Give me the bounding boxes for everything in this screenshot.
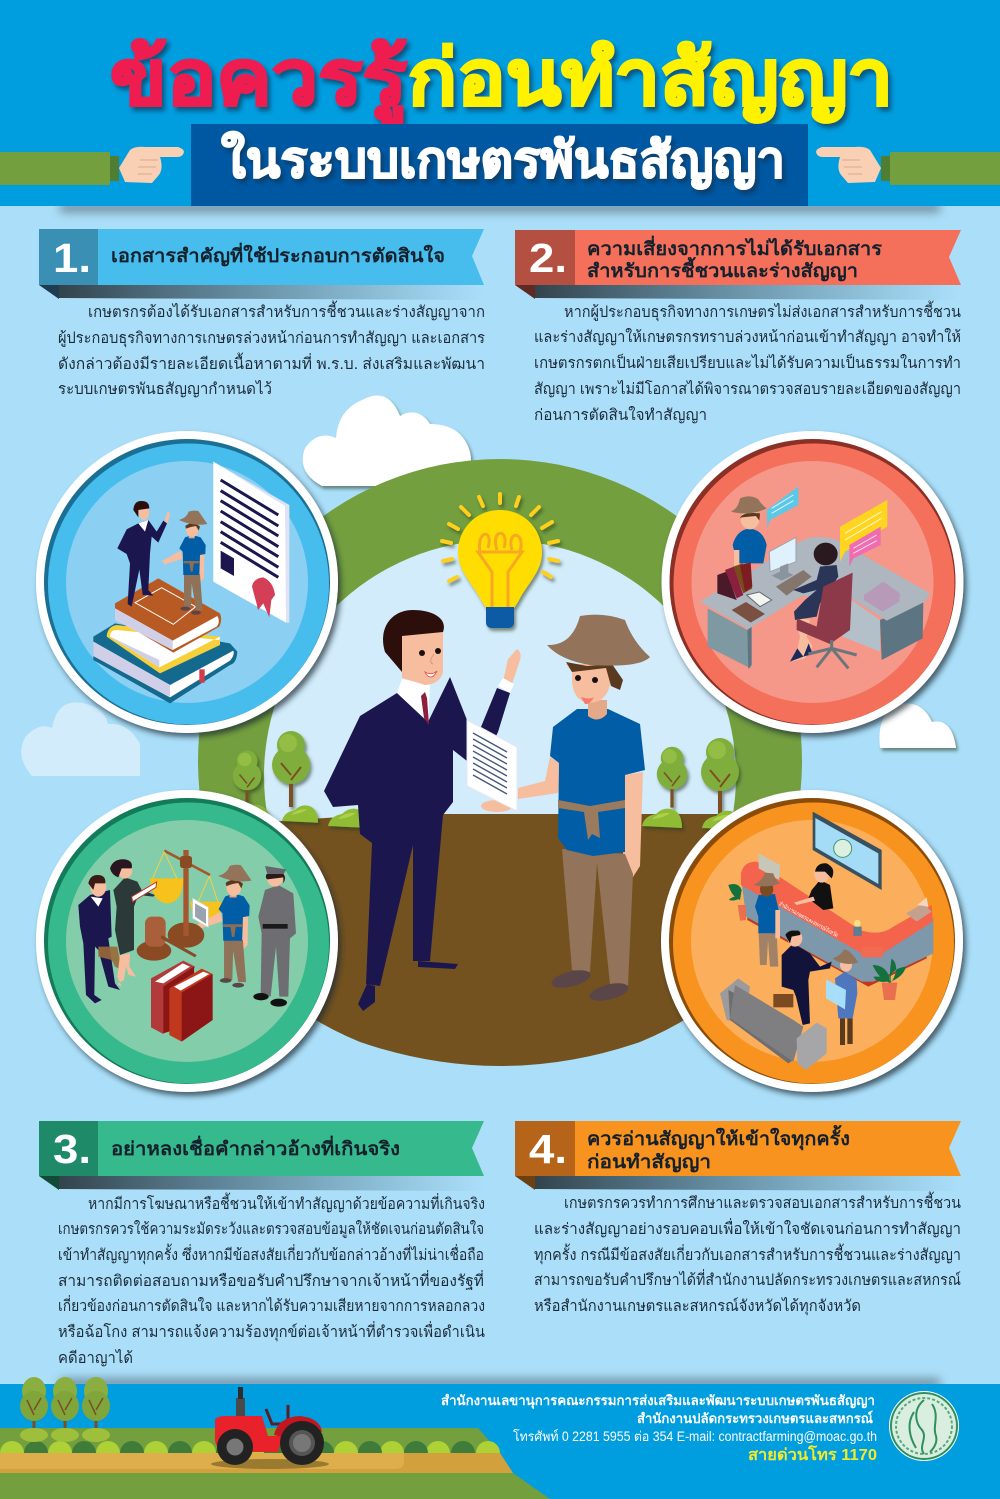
- certificate: [213, 462, 289, 623]
- ribbon 2: [515, 230, 961, 300]
- text block 4: เกษตรกรควรทำการศึกษาและตรวจสอบเอกสารสำหรับการชี้ชวน: [564, 1191, 961, 1212]
- title: [110, 36, 893, 125]
- farmer from behind: [753, 873, 780, 967]
- cloud: top centre: [303, 396, 471, 486]
- panel: section 3: [39, 1121, 485, 1367]
- paper: [193, 898, 208, 927]
- book stack: [93, 578, 237, 703]
- text block 3: หากมีการโฆษณาหรือชี้ชวนให้เข้าทำสัญญาด้วยข้อความที่เกินจริง: [88, 1192, 485, 1213]
- ribbon 2: 2.: [529, 235, 567, 281]
- central scene: [198, 459, 802, 1066]
- text block 2: ก่อนการตัดสินใจทำสัญญา: [534, 406, 707, 424]
- phone: [864, 582, 900, 612]
- subtitle: ในระบบเกษตรพันธสัญญา: [221, 131, 785, 189]
- businesswoman: [110, 859, 157, 987]
- text block 4: ทุกครั้ง กรณีมีข้อสงสัยเกี่ยวกับเอกสารสำหรับการชี้ชวนและร่างสัญญา: [534, 1243, 961, 1265]
- ribbon 4: ควรอ่านสัญญาให้เข้าใจทุกครั้ง: [587, 1125, 850, 1151]
- cash machine and plant: [853, 897, 932, 936]
- businessman: [773, 930, 832, 1025]
- footer background: [0, 1384, 1000, 1499]
- counter: สำนักงานเกษตรและสหกรณ์จังหวัด: [777, 900, 840, 939]
- text block 3: [58, 1192, 485, 1367]
- contact text: สำนักงานปลัดกระทรวงเกษตรและสหกรณ์: [637, 1410, 873, 1426]
- footer trees: [20, 1377, 110, 1442]
- farmer woman with paper: [826, 949, 858, 1045]
- text block 1: ระบบเกษตรพันธสัญญากำหนดไว้: [58, 380, 272, 398]
- icon circle 2: office consultation: [662, 431, 964, 733]
- icon: left pointing hand: [0, 147, 184, 185]
- police officer: [253, 866, 296, 1007]
- footer: [0, 1377, 1000, 1499]
- businessman: [78, 875, 122, 1003]
- businessman: [324, 610, 521, 1011]
- panel: section 4: [515, 1121, 961, 1316]
- farmer: [481, 615, 650, 1004]
- ground: [198, 814, 802, 1066]
- text block 4: สามารถขอรับคำปรึกษาได้ที่สำนักงานปลัดกระทรวงเกษตรและสหกรณ์: [534, 1269, 961, 1289]
- logo: ministry seal: [889, 1391, 959, 1461]
- text block 2: หากผู้ประกอบธุรกิจทางการเกษตรไม่ส่งเอกสารสำหรับการชี้ชวน: [564, 300, 961, 322]
- contact text: สายด่วนโทร 1170: [748, 1444, 877, 1464]
- scales of justice: [150, 850, 222, 948]
- ribbon 4: 4.: [529, 1126, 567, 1172]
- left plant: [728, 884, 746, 921]
- text block 3: เกษตรกรควรใช้ความระมัดระวังและตรวจสอบข้อมูลให้ชัดเจนก่อนตัดสินใจ: [58, 1220, 484, 1239]
- text block 3: คดีอาญาได้: [58, 1349, 133, 1367]
- speech bubbles: [767, 487, 887, 567]
- header shadow: [60, 203, 940, 212]
- green arch: [198, 459, 802, 1063]
- counter: [741, 862, 933, 987]
- text block 1: ผู้ประกอบธุรกิจทางการเกษตรล่วงหน้าก่อนการทำสัญญา และเอกสาร: [58, 330, 485, 348]
- text block 1: เกษตรกรต้องได้รับเอกสารสำหรับการชี้ชวนและร่างสัญญาจาก: [88, 300, 485, 321]
- desk: [700, 537, 930, 669]
- text block 1: ดังกล่าวต้องมีรายละเอียดเนื้อหาตามที่ พ.ร.บ. ส่งเสริมและพัฒนา: [58, 352, 485, 373]
- text block 3: สามารถติดต่อสอบถามหรือขอรับคำปรึกษาจากเจ้าหน้าที่ของรัฐที่: [58, 1270, 484, 1290]
- text block 4: และร่างสัญญาอย่างรอบคอบเพื่อให้เข้าใจชัดเจนก่อนการทำสัญญา: [534, 1218, 961, 1238]
- text block 2: สัญญา เพราะไม่มีโอกาสได้พิจารณาตรวจสอบรายละเอียดของสัญญา: [534, 380, 961, 398]
- right plant: [873, 958, 906, 1000]
- computer monitor: [759, 853, 780, 880]
- farm field: [0, 1428, 550, 1499]
- ribbon 3: [39, 1121, 484, 1191]
- text block 2: และร่างสัญญาให้เกษตรกรทราบล่วงหน้าก่อนเข้าทำสัญญา อาจทำให้: [534, 328, 961, 346]
- header background: [0, 0, 1000, 206]
- sky disc: [264, 540, 736, 1012]
- text block 4: [534, 1191, 961, 1316]
- ribbon 3: อย่าหลงเชื่อคำกล่าวอ้างที่เกินจริง: [111, 1135, 400, 1159]
- text block 2: [534, 300, 961, 424]
- text block 3: เข้าทำสัญญาทุกครั้ง ซึ่งหากมีข้อสงสัยเกี่ยวกับข้อกล่าวอ้างที่ไม่น่าเชื่อถือ: [58, 1243, 484, 1265]
- sofa: [720, 978, 827, 1070]
- trees left: [230, 731, 368, 828]
- text block 1: [58, 300, 485, 398]
- receptionist: [794, 863, 833, 910]
- farmer at desk: [731, 496, 767, 567]
- mini farmer: [162, 511, 207, 615]
- ribbon 3: 3.: [53, 1126, 91, 1172]
- gavel: [137, 917, 197, 961]
- contact text: สำนักงานเลขานุการคณะกรรมการส่งเสริมและพัฒนาระบบเกษตรพันธสัญญา: [441, 1393, 875, 1409]
- farmer: [198, 865, 252, 988]
- ribbon 1: [39, 229, 484, 300]
- panel: section 1: [39, 229, 485, 398]
- icon circle 1: documents on books: [36, 431, 338, 733]
- contact text: โทรศัพท์ 0 2281 5955 ต่อ 354 E-mail: contractfarming@moac.go.th: [513, 1428, 877, 1444]
- panel: section 2: [515, 230, 961, 424]
- ribbon 1: 1.: [53, 235, 91, 281]
- icon: right pointing hand: [816, 147, 1000, 185]
- title: ก่อนทำสัญญา: [408, 36, 893, 123]
- ribbon 4: ก่อนทำสัญญา: [587, 1151, 711, 1173]
- books and notebook: [717, 563, 772, 623]
- footer shadow: [60, 1379, 940, 1388]
- document: [467, 720, 517, 811]
- monitor and keyboard: [769, 537, 812, 596]
- trees right: [642, 738, 742, 830]
- text block 3: เกี่ยวข้องก่อนการตัดสินใจ และหากได้รับความเสียหายจากการหลอกลวง: [58, 1295, 485, 1315]
- text block 2: เกษตรกรตกเป็นฝ่ายเสียเปรียบและไม่ได้รับความเป็นธรรมในการทำ: [534, 353, 961, 372]
- law books: [151, 961, 213, 1042]
- icon circle 3: law and justice: [36, 790, 338, 1092]
- seated woman and chair: [790, 543, 857, 668]
- tractor: [211, 1387, 329, 1469]
- text block 4: หรือสำนักงานเกษตรและสหกรณ์จังหวัดได้ทุกจังหวัด: [534, 1297, 861, 1316]
- contact text: [441, 1393, 877, 1464]
- cloud: right: [879, 703, 956, 748]
- text block 3: หรือฉ้อโกง สามารถแจ้งความร้องทุกข์ต่อเจ้าหน้าที่ตำรวจเพื่อดำเนิน: [58, 1321, 485, 1342]
- subtitle box: [191, 124, 808, 206]
- ribbon 2: ความเสี่ยงจากการไม่ได้รับเอกสาร: [587, 235, 882, 259]
- cloud: left: [21, 702, 140, 776]
- title: ข้อควรรู้: [110, 36, 407, 125]
- icon circle 4: service counter: [661, 790, 963, 1092]
- ribbon 2: สำหรับการชี้ชวนและร่างสัญญา: [587, 257, 858, 282]
- wall screen with seal: [813, 812, 882, 890]
- mini businessman: [117, 501, 170, 607]
- ribbon 1: เอกสารสำคัญที่ใช้ประกอบการตัดสินใจ: [111, 242, 445, 267]
- ribbon 4: [515, 1121, 961, 1191]
- header band: [0, 0, 1000, 212]
- icon: light bulb: [442, 494, 558, 628]
